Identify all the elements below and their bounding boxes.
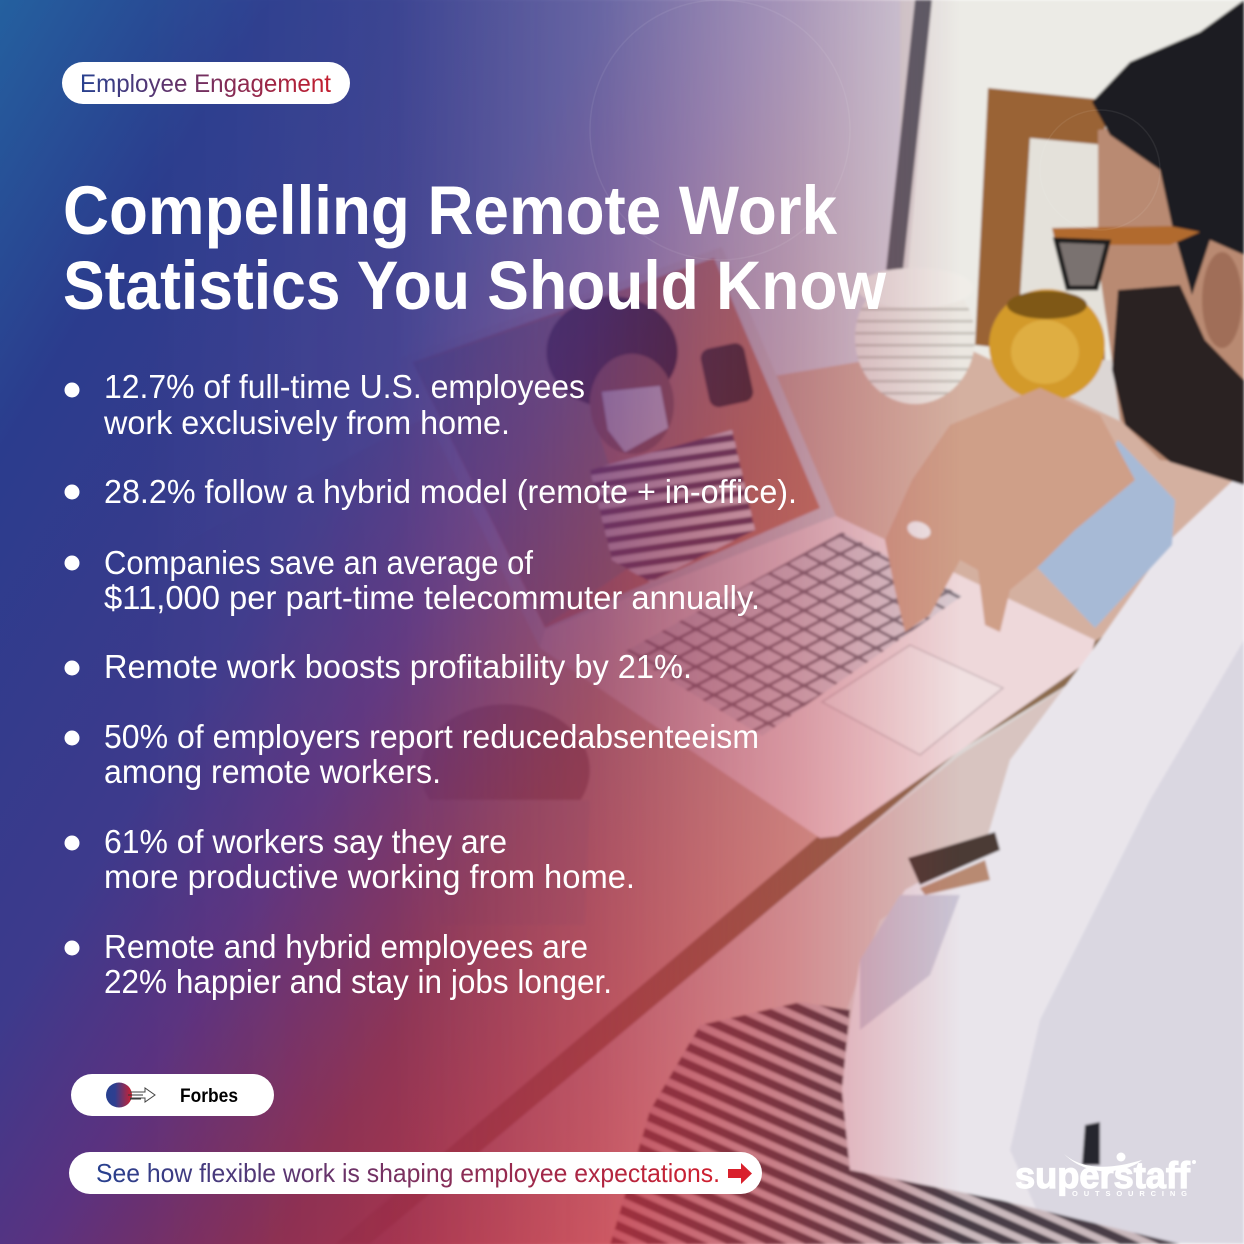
plant	[420, 704, 590, 925]
dark shape near logo	[1082, 1122, 1100, 1165]
stat: absenteeism: 50% of employers report reducedabsenteeism	[104, 718, 759, 755]
blue to red gradient overlay	[0, 0, 942, 1244]
man: sleeve cuff	[1030, 440, 1175, 628]
logo: superstaff outsourcing: OUTSOURCING	[1072, 1189, 1187, 1198]
laptop screen	[398, 247, 836, 648]
stat: productivity: 61% of workers say they are	[104, 823, 507, 860]
logo: superstaff outsourcing: superstaff	[1015, 1155, 1191, 1196]
stat: savings	[64, 544, 760, 616]
tag pill: Employee Engagement	[62, 62, 350, 104]
stat: fully remote: work exclusively from home.	[103, 404, 510, 441]
trackpad	[822, 645, 1003, 755]
call to action pill: See how flexible work is shaping employee expectations.	[96, 1158, 720, 1188]
icon: red arrow	[728, 1163, 752, 1184]
table surface	[0, 345, 1244, 1244]
stat: profitability: Remote work boosts profitability by 21%.	[104, 648, 692, 685]
stat: absenteeism	[64, 718, 759, 790]
candle holder	[855, 268, 975, 404]
stat: savings: $11,000 per part-time telecommuter annually.	[104, 579, 760, 616]
call to action pill	[69, 1152, 762, 1194]
source pill: Forbes: Forbes	[180, 1086, 238, 1107]
icon: source arrow	[106, 1082, 155, 1108]
yellow vase	[989, 289, 1105, 401]
man: shirt	[840, 470, 1244, 1244]
stat: happiness	[64, 928, 612, 1000]
stat: fully remote: 12.7% of full-time U.S. employees	[104, 368, 585, 405]
floor area under table	[360, 665, 1100, 1244]
man: face and beard	[1098, 110, 1244, 485]
laptop base	[540, 516, 1095, 838]
stat: happiness: Remote and hybrid employees are	[104, 928, 588, 965]
title: Statistics You Should Know	[63, 247, 886, 324]
stat: happiness: 22% happier and stay in jobs longer.	[104, 963, 612, 1000]
title	[63, 172, 886, 324]
stat: productivity	[64, 823, 635, 895]
table front edge	[335, 630, 1114, 1244]
source pill: Forbes	[71, 1074, 274, 1116]
stat: absenteeism: among remote workers.	[104, 753, 441, 790]
stat: fully remote	[64, 368, 585, 441]
keyboard	[624, 532, 962, 736]
man: hand and forearm	[885, 388, 1135, 632]
man: hair	[1092, 0, 1244, 295]
man: striped trousers	[610, 1002, 1180, 1244]
decorative faint circles	[590, 0, 1160, 260]
picture frame	[975, 88, 1105, 360]
title: Compelling Remote Work	[63, 172, 838, 249]
stat: hybrid: 28.2% follow a hybrid model (remote + in-office).	[104, 473, 797, 510]
tag pill: Employee Engagement: Employee Engagement	[80, 70, 331, 98]
stat: savings: Companies save an average of	[104, 544, 534, 581]
stat: productivity: more productive working from home.	[104, 858, 635, 895]
man: wrist and watch	[908, 832, 1000, 895]
man: glasses	[1052, 226, 1200, 288]
statistics list	[64, 368, 797, 1000]
